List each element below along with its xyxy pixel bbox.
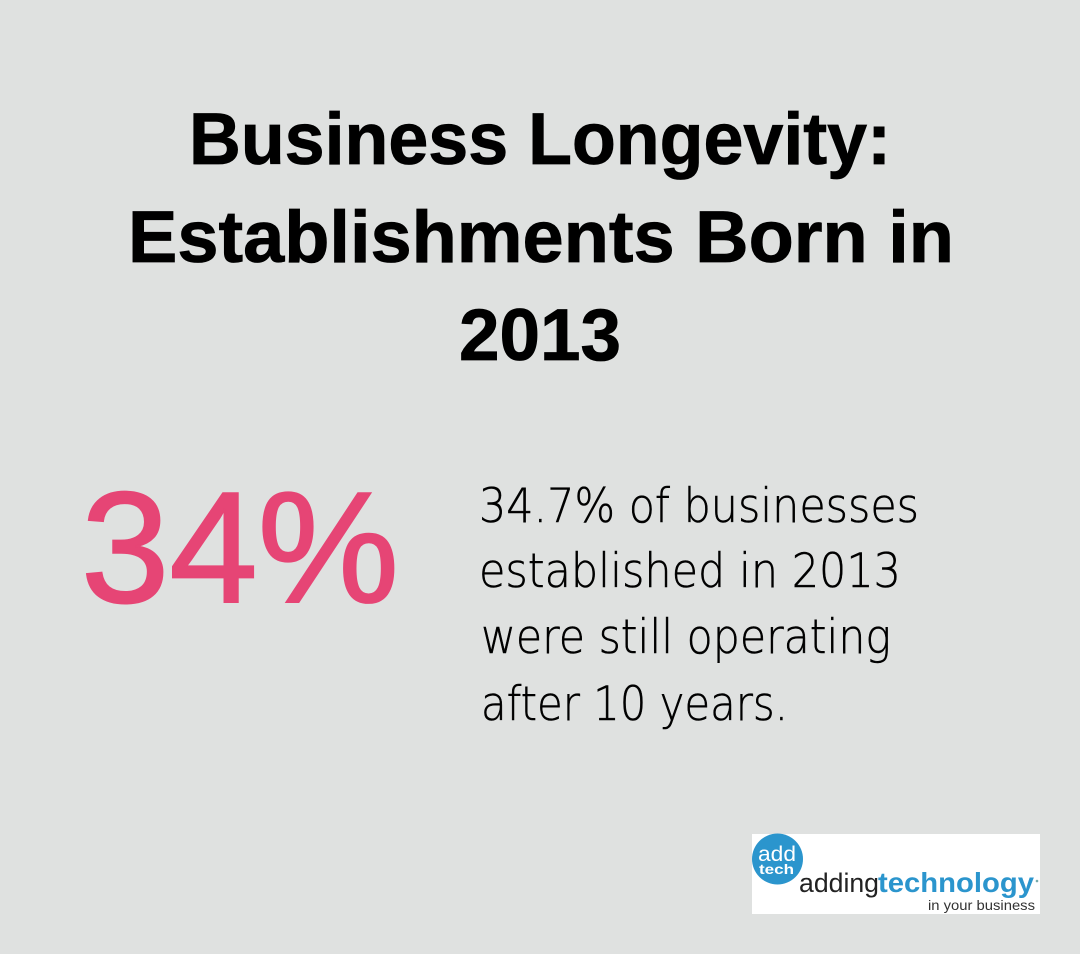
icon: add tech circle: tech xyxy=(759,861,794,877)
description text: established in 2013 xyxy=(479,544,901,599)
logo tagline: in your business xyxy=(928,897,1035,913)
title: 2013 xyxy=(459,295,621,376)
title: Establishments Born in xyxy=(128,197,954,278)
big statistic: 34%: 34% xyxy=(81,460,399,636)
logo: adding technology xyxy=(752,834,1040,914)
description text: after 10 years. xyxy=(481,677,788,732)
description text: were still operating xyxy=(481,610,891,665)
icon: add tech circle xyxy=(752,834,803,884)
logo wordmark: adding xyxy=(799,868,879,898)
title: Business Longevity: xyxy=(189,99,891,180)
logo: adding technology: technology xyxy=(878,867,1034,898)
description text xyxy=(479,479,919,732)
icon: add tech circle: add xyxy=(758,843,796,866)
title xyxy=(128,99,954,376)
description text: 34.7% of businesses xyxy=(479,479,919,534)
